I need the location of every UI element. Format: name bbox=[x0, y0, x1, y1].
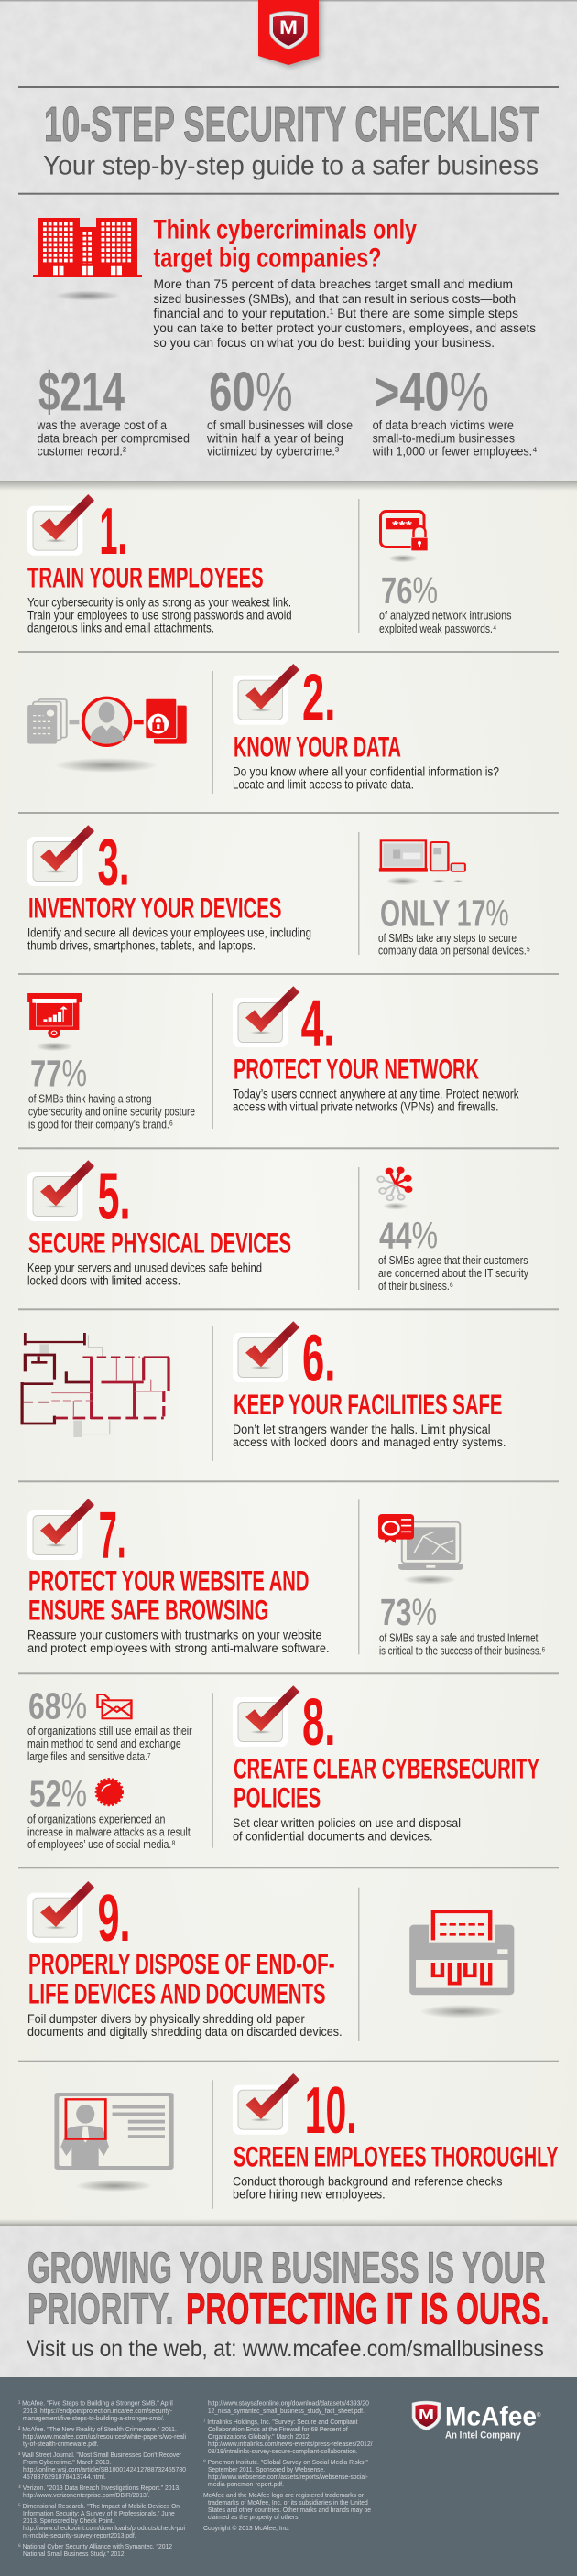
stat: >40%: small-to-medium businesses bbox=[373, 431, 515, 445]
panel: step 10 bbox=[54, 2073, 558, 2209]
intro heading bbox=[154, 215, 417, 274]
stat: 76%: 76% bbox=[381, 569, 438, 612]
step 8 heading bbox=[234, 1752, 539, 1813]
step 2 heading: KNOW YOUR DATA bbox=[234, 731, 401, 763]
references column 1: http://www.checkpoint.com/downloads/products/check-poi bbox=[23, 2524, 185, 2532]
references column 1: http://www.mcafee.com/us/resources/white-papers/wp-reali bbox=[23, 2432, 186, 2441]
icon: network nodes bbox=[377, 1167, 412, 1210]
references column 1: ⁵ Dimensional Research. "The Impact of Mobile Devices On bbox=[18, 2502, 180, 2510]
step 5 text bbox=[27, 1261, 262, 1287]
icon: checkbox 4 bbox=[233, 986, 299, 1047]
panel: header bbox=[0, 0, 577, 491]
references column 2: States and other countries. Other marks and brands may be bbox=[208, 2506, 371, 2514]
step number 8: 8. bbox=[302, 1686, 335, 1759]
step 1 text: Train your employees to use strong passwords and avoid bbox=[27, 609, 292, 622]
intro text bbox=[154, 277, 536, 350]
references column 1: ⁶ National Cyber Security Alliance with Symantec. "2012 bbox=[18, 2542, 172, 2550]
icon: checkbox 6 bbox=[233, 1321, 299, 1382]
references column 2: 12_ncsa_symantec_small_business_study_fact_sheet.pdf. bbox=[208, 2407, 365, 2415]
stat: 44% bbox=[378, 1214, 529, 1293]
stat: 44%: of SMBs agree that their customers bbox=[378, 1254, 528, 1267]
step 10 text bbox=[233, 2174, 503, 2201]
closing headline: PRIORITY. bbox=[27, 2285, 174, 2333]
stat: 68%: of organizations still use email as their bbox=[27, 1725, 192, 1737]
stat: 52%: of organizations experienced an bbox=[27, 1813, 165, 1825]
step 9 heading bbox=[28, 1947, 335, 2009]
references column 2: ⁷ Intralinks Holdings, Inc. "Survey: Secure and Compliant bbox=[203, 2418, 358, 2426]
step 7 text bbox=[27, 1629, 330, 1655]
references column 1: 2013. Sponsored by Check Point. bbox=[23, 2516, 114, 2525]
stat: 44%: of their business.⁶ bbox=[378, 1280, 453, 1293]
references column 2: September 2011. Sponsored by Websense. bbox=[208, 2465, 325, 2473]
panel: step 4 bbox=[27, 986, 519, 1131]
references column 1 bbox=[18, 2399, 186, 2558]
step 4 text: access with virtual private networks (VPNs) and firewalls. bbox=[233, 1100, 498, 1114]
references column 2 bbox=[203, 2399, 373, 2532]
step 6 text bbox=[233, 1423, 506, 1449]
icon: floor plan bbox=[22, 1333, 169, 1437]
stat: 77%: of SMBs think having a strong bbox=[28, 1092, 152, 1105]
intro text: you can take to better protect your customers, employees, and assets bbox=[154, 321, 536, 335]
step 9 heading: LIFE DEVICES AND DOCUMENTS bbox=[28, 1976, 326, 2009]
stat: 77%: 77% bbox=[30, 1053, 87, 1095]
stat: >40%: with 1,000 or fewer employees.⁴ bbox=[372, 445, 538, 459]
references column 1: From Cybercrime." March 2013. bbox=[23, 2458, 111, 2466]
icon: checkbox 2 bbox=[233, 664, 299, 725]
McAfee logo bbox=[412, 2401, 541, 2441]
panel: step 3 bbox=[27, 825, 530, 958]
panel: step 9 bbox=[27, 1881, 514, 2041]
references column 2: McAfee and the McAfee logo are registered trademarks or bbox=[203, 2491, 364, 2499]
references column 2: media-ponemon-report.pdf. bbox=[208, 2480, 284, 2488]
icon: malware badge bbox=[96, 1779, 123, 1805]
step number 3: 3. bbox=[97, 826, 130, 899]
stat: 52%: 52% bbox=[29, 1772, 87, 1814]
panel: step 1 bbox=[27, 494, 511, 635]
stat: 52%: increase in malware attacks as a result bbox=[27, 1825, 191, 1838]
stat: 76% bbox=[379, 569, 511, 635]
references column 1: ¹ McAfee. "Five Steps to Building a Stronger SMB." April bbox=[18, 2399, 173, 2408]
step 9 heading: PROPERLY DISPOSE OF END-OF- bbox=[28, 1947, 335, 1980]
stat: $214: $214 bbox=[38, 361, 125, 422]
step number 2: 2. bbox=[302, 662, 335, 735]
stat: >40%: >40% bbox=[374, 361, 489, 422]
step 3 heading: INVENTORY YOUR DEVICES bbox=[28, 892, 281, 925]
step 10 text: Conduct thorough background and reference checks bbox=[233, 2174, 503, 2188]
references column 1: ³ Wall Street Journal. "Most Small Businesses Don't Recover bbox=[18, 2451, 181, 2459]
step 8 text bbox=[233, 1816, 461, 1843]
panel: step 6 bbox=[22, 1321, 506, 1461]
step 7 heading: ENSURE SAFE BROWSING bbox=[28, 1593, 268, 1626]
step 7 heading bbox=[28, 1564, 310, 1626]
panel: step 7: 7. bbox=[99, 1499, 126, 1573]
step 9 text: documents and digitally shredding data on discarded devices. bbox=[27, 2025, 343, 2039]
icon: checkbox 5 bbox=[27, 1160, 94, 1221]
stat: 52%: of employees’ use of social media.⁸ bbox=[27, 1838, 176, 1851]
stat: 60% bbox=[206, 361, 353, 459]
icon: email bbox=[97, 1694, 131, 1718]
icon: checkbox 9 bbox=[27, 1881, 94, 1943]
references column 1: management/five-steps-to-building-a-stronger-smb/. bbox=[23, 2414, 165, 2422]
references column 2: http://www.websense.com/assets/reports/websense-social- bbox=[208, 2473, 368, 2481]
stat: only 17%: company data on personal devices.⁵ bbox=[378, 945, 530, 958]
intro heading: target big companies? bbox=[154, 244, 381, 274]
stat: only 17% bbox=[378, 893, 530, 958]
stat: >40%: of data breach victims were bbox=[373, 418, 514, 432]
stat: $214: data breach per compromised bbox=[37, 431, 190, 445]
icon: ID card bbox=[54, 2093, 174, 2192]
closing headline bbox=[27, 2244, 550, 2333]
stat: only 17%: ONLY 17% bbox=[380, 893, 509, 935]
intro text: More than 75 percent of data breaches target small and medium bbox=[154, 277, 513, 291]
step number 10: 10. bbox=[305, 2074, 357, 2148]
intro heading: Think cybercriminals only bbox=[154, 215, 417, 245]
step number 9: 9. bbox=[97, 1882, 130, 1955]
icon: certificate and laptop bbox=[378, 1514, 463, 1585]
references column 2: Organizations Globally." March 2012. bbox=[208, 2432, 311, 2441]
McAfee logo: M bbox=[419, 2407, 434, 2422]
step 5 heading: SECURE PHYSICAL DEVICES bbox=[28, 1226, 291, 1259]
intro text: sized businesses (SMBs), and that can result in serious costs—both bbox=[154, 292, 516, 306]
stat: 68% bbox=[27, 1684, 192, 1763]
step 7 text: and protect employees with strong anti-malware software. bbox=[27, 1641, 330, 1655]
step 1 text bbox=[27, 596, 292, 634]
step 5 text: locked doors with limited access. bbox=[27, 1273, 180, 1287]
stat: only 17%: of SMBs take any steps to secure bbox=[378, 932, 517, 945]
icon: checkbox 1 bbox=[27, 494, 94, 556]
panel: step 1: 1. bbox=[99, 495, 126, 568]
step 10 text: before hiring new employees. bbox=[233, 2188, 386, 2201]
panel: step 8 bbox=[27, 1684, 539, 1851]
references column 1: ² McAfee. "The New Reality of Stealth Crimeware." 2011. bbox=[18, 2425, 177, 2433]
icon: password lock bbox=[381, 511, 428, 562]
stat: 60%: of small businesses will close bbox=[207, 418, 353, 432]
stat: 68%: 68% bbox=[28, 1684, 87, 1726]
references column 2: Collaboration Ends at the Firewall for 68 Percent of bbox=[208, 2425, 348, 2433]
panel: footer bbox=[0, 2377, 577, 2576]
step 3 text: thumb drives, smartphones, tablets, and laptops. bbox=[27, 938, 256, 952]
stat: 68%: large files and sensitive data.⁷ bbox=[27, 1750, 151, 1763]
step 5 text: Keep your servers and unused devices safe behind bbox=[27, 1261, 262, 1274]
references column 1: http://www.verizonenterprise.com/DBIR/2013/. bbox=[23, 2491, 150, 2499]
website line: Visit us on the web, at: www.mcafee.com/smallbusiness bbox=[27, 2336, 544, 2362]
references column 2: http://www.staysafeonline.org/download/datasets/4393/20 bbox=[208, 2399, 369, 2408]
references column 1: nt-mobile-security-survey-report2013.pdf. bbox=[23, 2531, 136, 2539]
panel: step 7 bbox=[27, 1499, 545, 1657]
step 6 text: access with locked doors and managed entry systems. bbox=[233, 1435, 506, 1449]
McAfee logo: ® bbox=[537, 2412, 541, 2419]
step 4 text: Today’s users connect anywhere at any time. Protect network bbox=[233, 1087, 519, 1100]
step 3 text: Identify and secure all devices your employees use, including bbox=[27, 925, 311, 939]
references column 1: 4578376291878413744.html. bbox=[23, 2473, 106, 2481]
stat: $214: was the average cost of a bbox=[37, 418, 167, 432]
references column 1: Information Security: A Survey of It Professionals." June bbox=[23, 2509, 175, 2517]
stat: 52% bbox=[27, 1772, 191, 1851]
stat: 73%: of SMBs say a safe and trusted Internet bbox=[379, 1631, 539, 1644]
step 8 text: Set clear written policies on use and disposal bbox=[233, 1816, 461, 1830]
stat: $214 bbox=[37, 361, 190, 459]
stat: 77%: is good for their company's brand.⁶ bbox=[28, 1119, 173, 1131]
step 1 text: Your cybersecurity is only as strong as your weakest link. bbox=[27, 596, 291, 610]
stat: 76%: of analyzed network intrusions bbox=[379, 610, 511, 622]
stat: 60%: 60% bbox=[209, 361, 293, 422]
icon: checkbox 3 bbox=[27, 825, 94, 886]
step 7 heading: PROTECT YOUR WEBSITE AND bbox=[28, 1564, 310, 1597]
references column 2: trademarks of McAfee, Inc. or its subsidiaries in the United bbox=[208, 2498, 368, 2506]
panel: step 2 bbox=[27, 662, 499, 794]
stat: 60%: within half a year of being bbox=[206, 431, 343, 445]
step 9 text: Foil dumpster divers by physically shredding old paper bbox=[27, 2012, 305, 2026]
stat: 76%: exploited weak passwords.⁴ bbox=[379, 622, 496, 635]
stat: 73%: 73% bbox=[380, 1591, 437, 1633]
stat: 73% bbox=[379, 1591, 545, 1657]
references column 2: claimed as the property of others. bbox=[208, 2513, 299, 2521]
icon: office building bbox=[33, 218, 142, 300]
step 2 text bbox=[233, 764, 499, 792]
icon: presentation board bbox=[27, 993, 82, 1051]
stat: $214: customer record.² bbox=[37, 445, 126, 459]
stat: 60%: victimized by cybercrime.³ bbox=[207, 445, 339, 459]
stat: 77%: cybersecurity and online security posture bbox=[28, 1105, 195, 1118]
step 1 heading: TRAIN YOUR EMPLOYEES bbox=[27, 561, 264, 594]
references column 1: National Small Business Study." 2012. bbox=[23, 2549, 125, 2558]
stat: 44%: 44% bbox=[379, 1214, 438, 1256]
step 6 text: Don’t let strangers wander the halls. Limit physical bbox=[233, 1423, 491, 1436]
stat: 77% bbox=[28, 1053, 195, 1131]
step 2 text: Locate and limit access to private data. bbox=[233, 778, 414, 792]
stat: 44%: are concerned about the IT security bbox=[378, 1267, 529, 1280]
references column 2: http://www.intralinks.com/news-events/press-releases/2012/ bbox=[208, 2440, 373, 2448]
panel: step 5 bbox=[27, 1160, 529, 1293]
step number 4: 4. bbox=[301, 987, 335, 1060]
icon: devices bbox=[379, 840, 465, 885]
references column 1: ⁴ Verizon. "2013 Data Breach Investigations Report." 2013. bbox=[18, 2484, 180, 2492]
McAfee logo: McAfee bbox=[445, 2401, 537, 2431]
references column 1: http://online.wsj.com/article/SB1000142412788732455780 bbox=[23, 2465, 186, 2473]
icon: checkbox 7 bbox=[27, 1499, 94, 1560]
step 1 text: dangerous links and email attachments. bbox=[27, 621, 214, 634]
icon: shredder bbox=[409, 1911, 514, 2019]
stat: 68%: main method to send and exchange bbox=[27, 1737, 181, 1750]
references column 1: 2013. https://endpointprotection.mcafee.com/security- bbox=[23, 2407, 172, 2415]
step 8 text: of confidential documents and devices. bbox=[233, 1829, 432, 1843]
references column 2: ⁸ Ponemon Institute. "Global Survey on Social Media Risks." bbox=[203, 2458, 368, 2466]
icon: checkbox 8 bbox=[233, 1685, 299, 1747]
icon: data flow bbox=[27, 698, 187, 773]
logo ribbon bbox=[258, 0, 321, 68]
step 2 text: Do you know where all your confidential information is? bbox=[233, 764, 499, 778]
logo ribbon: M bbox=[279, 17, 298, 38]
step 9 text bbox=[27, 2012, 343, 2039]
step number 5: 5. bbox=[97, 1161, 130, 1234]
step 8 heading: POLICIES bbox=[234, 1780, 321, 1813]
subtitle: Your step-by-step guide to a safer business bbox=[43, 151, 539, 181]
panel: closing message bbox=[0, 2219, 577, 2377]
McAfee logo: An Intel Company bbox=[445, 2430, 521, 2441]
references column 2: Copyright © 2013 McAfee, Inc. bbox=[203, 2524, 289, 2532]
icon: password lock: *** bbox=[392, 518, 413, 532]
intro text: so you can focus on what you do best: building your business. bbox=[154, 336, 495, 350]
references column 2: 03/19/intralinks-survey-secure-compliant-collaboration. bbox=[208, 2447, 357, 2455]
intro text: financial and to your reputation.¹ But there are some simple steps bbox=[154, 307, 518, 320]
step 4 text bbox=[233, 1087, 519, 1114]
step number 6: 6. bbox=[302, 1322, 335, 1395]
step 3 text bbox=[27, 925, 311, 952]
stat: >40% bbox=[372, 361, 538, 459]
references column 1: ty-of-stealth-crimeware.pdf. bbox=[23, 2440, 99, 2448]
icon: checkbox 10 bbox=[233, 2073, 299, 2135]
step 7 text: Reassure your customers with trustmarks on your website bbox=[27, 1629, 322, 1642]
